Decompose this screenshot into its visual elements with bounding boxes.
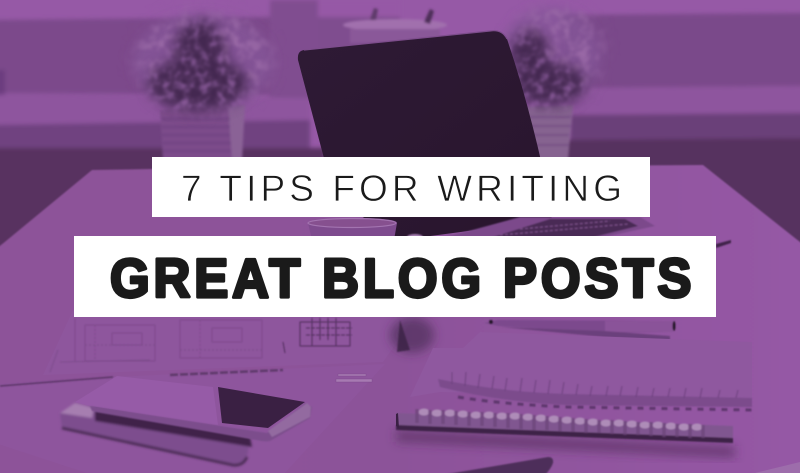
heading box: great blog posts: GREAT BLOG POSTS	[110, 248, 691, 309]
icon: left potted plant	[133, 12, 273, 160]
heading box: 7 tips for writing: 7 TIPS FOR WRITING	[181, 168, 622, 209]
heading box: great blog posts	[74, 236, 716, 317]
window ornament behind laptop	[343, 8, 447, 43]
desk surface	[0, 165, 800, 473]
small object at left of notepad	[396, 413, 800, 473]
notebook and smartphone	[60, 376, 312, 465]
coffee cup	[308, 218, 410, 325]
icon: right potted plant	[500, 6, 600, 160]
shadow and open notepad	[390, 317, 752, 410]
heading box: 7 tips for writing	[152, 157, 650, 217]
blueprint papers	[0, 310, 420, 473]
spiral notebook with rings	[396, 408, 735, 458]
pen on desk	[484, 320, 676, 340]
laptop screen	[298, 31, 552, 240]
laptop keyboard and base	[407, 217, 731, 248]
dark pen at bottom edge	[436, 457, 553, 473]
